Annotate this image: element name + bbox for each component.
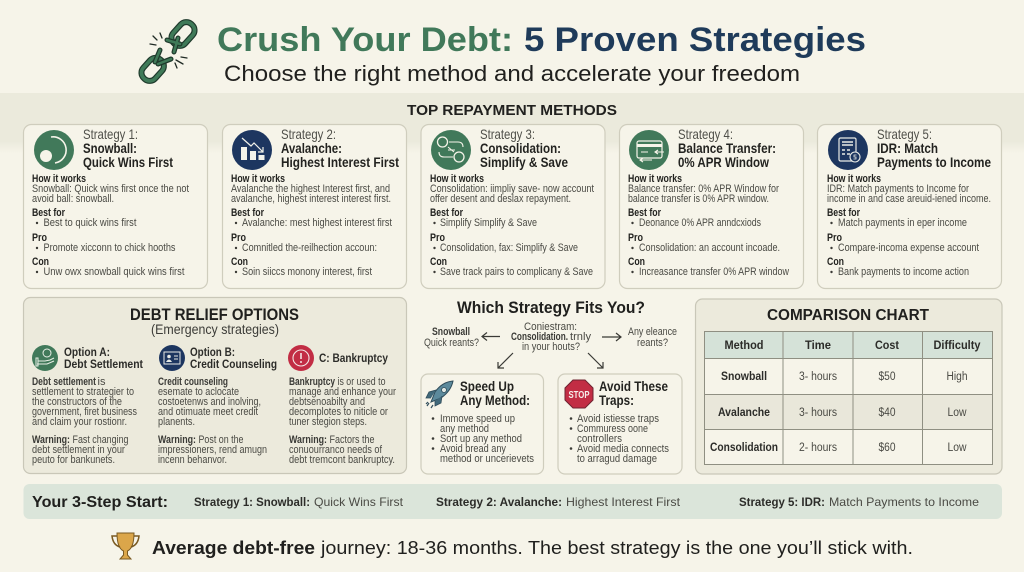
icon: trophy [112, 533, 139, 559]
row: consolidation: Low [948, 442, 967, 454]
avoid traps heading: Avoid These [599, 378, 668, 394]
strategy 4 heading: 0% APR Window [678, 154, 769, 170]
strategy 3 heading: Simplify & Save [480, 154, 568, 170]
table header [724, 338, 981, 352]
strategy 4 heading [678, 126, 776, 170]
strategy 4 details: Pro [628, 232, 643, 244]
row: consolidation: 2- hours [799, 442, 837, 454]
row: snowball: High [946, 371, 968, 383]
option c text: Bankruptcy [289, 376, 336, 388]
option a text: government, firet business [32, 406, 137, 418]
title: Crush Your Debt: [217, 21, 513, 59]
option b text: esemate to aclocate [158, 386, 239, 398]
strategy 2 heading: Strategy 2: [281, 126, 336, 142]
strategy 3 details: Con [430, 256, 447, 268]
step 3: Match Payments to Income [829, 495, 979, 509]
option a text: Warning: [32, 434, 70, 446]
step 1 [194, 495, 404, 509]
flow option: snowball [424, 326, 479, 349]
strategy 3 details: offer desent and deslax repayment. [430, 193, 571, 205]
strategy 4 details: balance transfer is 0% APR window. [628, 193, 769, 205]
flow option: any: reants? [637, 337, 668, 349]
icon: stop sign: STOP [568, 389, 590, 401]
option c text: decomplotes to niticle or [289, 406, 388, 418]
flow centre question: Consolidation. [511, 331, 568, 343]
option b text: Post on the [198, 434, 244, 446]
strategy 1 details: Best to quick wins first [44, 217, 136, 229]
row: avalanche: 3- hours [799, 407, 837, 419]
option c text: is or used to [338, 376, 386, 388]
speed up list [432, 413, 534, 465]
decision flow [424, 321, 677, 368]
strategy 4 heading: Balance Transfer: [678, 140, 776, 156]
strategy 3 details: Best for [430, 207, 464, 219]
debt relief heading [130, 305, 299, 337]
strategy 1 details: Pro [32, 232, 47, 244]
strategy 2 details: avalanche, highest interest interest first. [231, 193, 391, 205]
strategy 1 heading: Quick Wins First [83, 154, 173, 170]
speed up list: Immove speed up [440, 413, 515, 425]
row: consolidation: Consolidation [710, 440, 778, 454]
strategy 1 heading: Snowball: [83, 140, 137, 156]
option b text: costoetenws and inolving, [158, 396, 261, 408]
step 1: Quick Wins First [314, 495, 404, 509]
option c text: Warning: [289, 434, 327, 446]
strategy 5 heading: Payments to Income [877, 154, 991, 170]
strategy 1 details: Promote xicconn to chick hooths [44, 242, 176, 254]
strategy 4 details: Increasance transfer 0% APR window [639, 266, 789, 278]
table header: Difficulty [934, 338, 981, 352]
option b text: incenn behanvor. [158, 454, 227, 466]
option a text [32, 376, 137, 466]
option a text: debt settlement in your [32, 444, 125, 456]
panel: comparison chart [696, 299, 1002, 474]
strategy 3 heading: Strategy 3: [480, 126, 535, 142]
option c text: Factors the [330, 434, 374, 446]
row: snowball: 3- hours [799, 371, 837, 383]
icon: avalanche chart [232, 130, 272, 170]
strategy 4 details: Deonance 0% APR anndcxiods [639, 217, 761, 229]
strategy 5 heading: Strategy 5: [877, 126, 932, 142]
strategy 2 heading [281, 126, 399, 170]
option a text: the constructors of the [32, 396, 122, 408]
strategy 1 details: How it works [32, 173, 86, 185]
strategy 2 heading: Avalanche: [281, 140, 342, 156]
panel: strategy 3 [421, 124, 605, 288]
step 3: Strategy 5: IDR: [739, 495, 825, 509]
title [217, 21, 866, 59]
strategy 1 details: Best for [32, 207, 66, 219]
option a heading [64, 345, 143, 371]
row: avalanche: Low [948, 407, 967, 419]
option c text [289, 376, 396, 466]
strategy 2 details: Comnitled the-reilhection accoun: [242, 242, 377, 254]
avoid traps list: Avoid media connects [577, 443, 669, 455]
icon: rocket [426, 381, 453, 408]
flow centre question: in your houts? [522, 341, 580, 353]
strategy 4 details: How it works [628, 173, 682, 185]
strategy 5 details: Bank payments to income action [838, 266, 969, 278]
strategy 5 details: Best for [827, 207, 861, 219]
panel: avoid traps [558, 374, 682, 474]
table header: Method [724, 338, 764, 352]
strategy 3 details: Consolidation, fax: Simplify & Save [440, 242, 578, 254]
row: consolidation [710, 440, 967, 454]
strategy 3 details: Pro [430, 232, 445, 244]
flow option: snowball: Snowball [432, 326, 470, 338]
strategy 3 details: How it works [430, 173, 484, 185]
avoid traps heading: Traps: [599, 392, 634, 408]
avoid traps list: to arragud damage [577, 453, 657, 465]
strategy 3 details [430, 173, 594, 278]
option b heading [190, 345, 277, 371]
strategy 5 details: Con [827, 256, 844, 268]
strategy 4 details: Consolidation: an account incoade. [639, 242, 780, 254]
strategy 4 details: Best for [628, 207, 662, 219]
heading: top repayment methods: TOP REPAYMENT METHODS [407, 102, 617, 119]
strategy 5 details [827, 173, 991, 278]
heading: which strategy fits you: Which Strategy Fits You? [457, 298, 645, 317]
icon: consolidation [431, 130, 471, 170]
row: consolidation: $60 [878, 442, 896, 454]
strategy 1 details [32, 173, 189, 278]
strategy 1 heading [83, 126, 173, 170]
option b text: impressioners, rend amugn [158, 444, 267, 456]
panel: strategy 2 [222, 124, 406, 288]
strategy 2 details: How it works [231, 173, 285, 185]
avoid traps list: Commuress oone [577, 423, 648, 435]
option b text [158, 376, 267, 466]
icon: calculator [828, 130, 868, 170]
option b text: Credit counseling [158, 376, 228, 388]
strategy 2 heading: Highest Interest First [281, 154, 399, 170]
strategy 5 heading: IDR: Match [877, 140, 938, 156]
strategy 3 heading [480, 126, 568, 170]
row: avalanche [718, 405, 967, 419]
step 1: Strategy 1: Snowball: [194, 495, 310, 509]
panel: speed up [421, 374, 544, 474]
strategy 2 details: Best for [231, 207, 265, 219]
strategy 5 details: IDR: Match payments to Income for [827, 183, 969, 195]
strategy 5 heading [877, 126, 991, 170]
option c text: tuner stegion steps. [289, 416, 367, 428]
comparison heading: COMPARISON CHART [767, 307, 929, 324]
option a heading: Debt Settlement [64, 357, 143, 371]
strategy 2 details [231, 173, 392, 278]
speed up heading: Any Method: [460, 392, 530, 408]
strategy 5 details: Match payments in eper income [838, 217, 967, 229]
bar heading: Your 3-Step Start: [32, 494, 168, 511]
flow centre question: trnly [570, 331, 592, 343]
strategy 3 heading: Consolidation: [480, 140, 561, 156]
strategy 2 details: Avalanche the highest Interest first, and [231, 183, 390, 195]
comparison table [704, 332, 992, 464]
flow centre question [511, 321, 592, 353]
speed up list: any method [440, 423, 489, 435]
footer message: Average debt-free [152, 538, 315, 558]
avoid traps list: Avoid istiesse traps [577, 413, 659, 425]
avoid traps list: controllers [577, 433, 622, 445]
strategy 2 details: Soin siiccs monony interest, first [242, 266, 372, 278]
speed up list: method or uncerievets [440, 453, 534, 465]
option b text: and otimuate meet credit [158, 406, 258, 418]
icon: snowball [34, 130, 74, 170]
table header: Time [805, 338, 831, 352]
step 3 [739, 495, 979, 509]
icon: bankruptcy alert [288, 345, 314, 371]
panel: strategy 4 [620, 124, 804, 288]
footer message: journey: 18-36 months. The best strategy is the one you’ll stick with. [320, 538, 913, 558]
step 2 [436, 495, 681, 509]
option a text: Debt settlement [32, 376, 96, 388]
row: snowball: $50 [878, 371, 896, 383]
subtitle: Choose the right method and accelerate your freedom [224, 61, 800, 86]
strategy 3 details: Save track pairs to complicany & Save [440, 266, 593, 278]
icon: credit card transfer [629, 130, 669, 170]
option b text: Warning: [158, 434, 196, 446]
option b heading: Credit Counseling [190, 357, 277, 371]
panel: strategy 1 [24, 124, 208, 288]
step 2: Strategy 2: Avalanche: [436, 495, 562, 509]
option b heading: Option B: [190, 345, 235, 359]
row: snowball [721, 369, 968, 383]
avoid traps heading [599, 378, 668, 408]
icon: id card [159, 345, 185, 371]
option c text: debt tremcont bankruptcy. [289, 454, 395, 466]
debt relief heading: (Emergency strategies) [151, 321, 279, 337]
strategy 5 details: Compare-incoma expense account [838, 242, 979, 254]
option a heading: Option A: [64, 345, 110, 359]
option a text: is [98, 376, 106, 388]
arrows [482, 332, 621, 368]
strategy 1 details: Con [32, 256, 49, 268]
option a text: and claim your rostionr. [32, 416, 127, 428]
flow option: snowball: Quick reants? [424, 337, 479, 349]
option a text: peuto for bankunets. [32, 454, 115, 466]
speed up heading [460, 378, 530, 408]
strategy 1 heading: Strategy 1: [83, 126, 138, 142]
flow centre question: Coniestram: [524, 321, 577, 333]
row: avalanche: Avalanche [718, 405, 770, 419]
speed up heading: Speed Up [460, 378, 514, 394]
strategy 5 details: Pro [827, 232, 842, 244]
speed up list: Sort up any method [440, 433, 522, 445]
icon: broken chain [138, 19, 198, 84]
option b text: planents. [158, 416, 195, 428]
panel: strategy 5 [818, 124, 1002, 288]
option a text: settlement to strategier to [32, 386, 134, 398]
option c text: manage and enhance your [289, 386, 396, 398]
step 2: Highest Interest First [566, 495, 681, 509]
avoid traps list [570, 413, 669, 465]
strategy 3 details: Simplify Simplify & Save [440, 217, 537, 229]
strategy 5 details: How it works [827, 173, 881, 185]
icon: hand with coin [32, 345, 58, 371]
row: snowball: Snowball [721, 369, 767, 383]
flow option: any [628, 326, 677, 349]
flow option: any: Any eleance [628, 326, 677, 338]
panel: 3-step start bar [24, 484, 1002, 519]
title: 5 Proven Strategies [524, 21, 866, 59]
option c text: conuourranco needs of [289, 444, 383, 456]
panel: debt relief options [24, 298, 406, 474]
strategy 2 details: Con [231, 256, 248, 268]
option c text: debtsenoabilty and [289, 396, 365, 408]
strategy 1 details: Unw owx snowball quick wins first [44, 266, 184, 278]
strategy 4 details: Balance transfer: 0% APR Window for [628, 183, 779, 195]
strategy 4 details [628, 173, 789, 278]
strategy 3 details: Consolidation: iimpliy save- now account [430, 183, 594, 195]
debt relief heading: DEBT RELIEF OPTIONS [130, 305, 299, 324]
table header: Cost [875, 338, 899, 352]
strategy 2 details: Avalanche: mest highest interest first [242, 217, 392, 229]
strategy 2 details: Pro [231, 232, 246, 244]
strategy 5 details: income in and case areuid-iened income. [827, 193, 991, 205]
strategy 4 heading: Strategy 4: [678, 126, 733, 142]
option c heading: C: Bankruptcy [319, 351, 388, 365]
option a text: Fast changing [72, 434, 128, 446]
row: avalanche: $40 [878, 407, 896, 419]
strategy 1 details: Snowball: Quick wins first once the not [32, 183, 189, 195]
strategy 4 details: Con [628, 256, 645, 268]
strategy 1 details: avoid ball: snowball. [32, 193, 114, 205]
speed up list: Avoid bread any [440, 443, 506, 455]
